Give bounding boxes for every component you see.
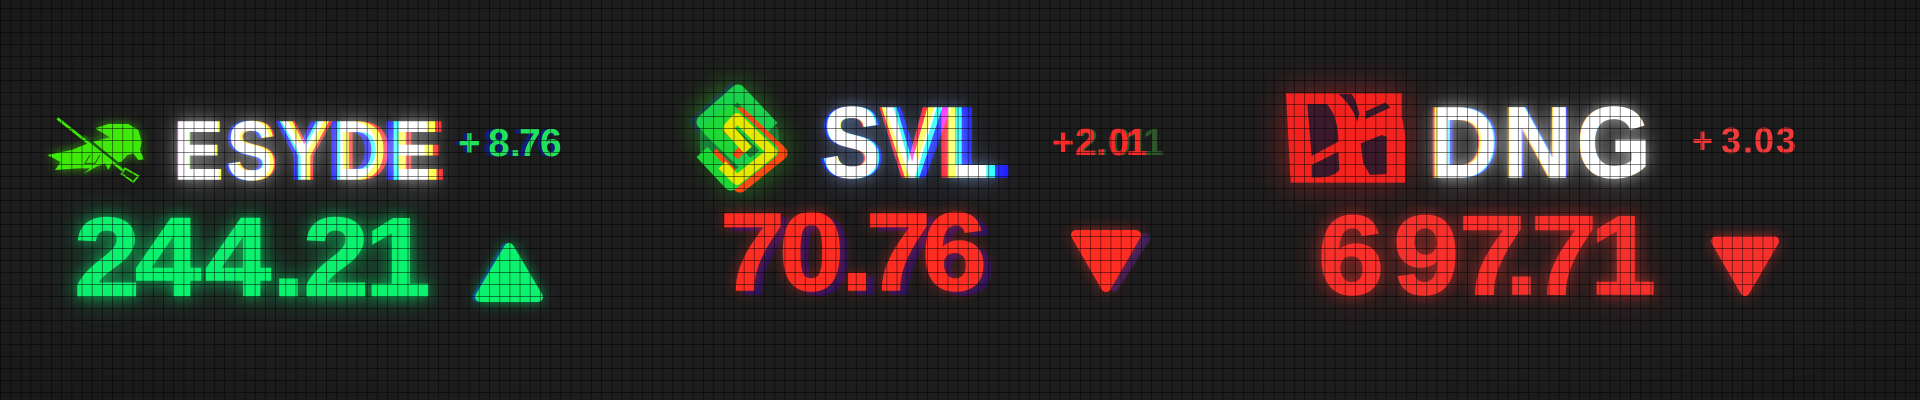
arrow: down triangle (1076, 235, 1146, 287)
ticker name: DNG: DNG (1430, 87, 1655, 199)
icon: red DG monogram logo (1286, 93, 1406, 183)
panel: DNG ticker (1286, 86, 1796, 318)
change value: +8.76: +8.76 (458, 122, 562, 165)
price: 697.71: 697.71 (1318, 194, 1656, 318)
ticker name: SVL: SVL (822, 87, 999, 199)
price: 70.76: 70.76 (720, 191, 987, 314)
panel: ESYDE ticker (47, 104, 562, 320)
ticker name: DNG: DNG (1427, 86, 1656, 198)
ticker name: ESYDE: ESYDE (174, 104, 445, 197)
ticker name: ESYDE: ESYDE (174, 104, 445, 197)
change value: +2.01: 2.011 (1077, 122, 1164, 164)
icon: green bird with rifle logo (47, 118, 144, 182)
price: 244.21: 244.21 (74, 196, 431, 320)
panel: SVL ticker (689, 81, 1164, 318)
price: 70.76: 70.76 (720, 191, 987, 314)
price: 697.71: 697.71 (1318, 194, 1656, 318)
ticker name: DNG: DNG (1429, 86, 1656, 198)
ticker name: SVL: SVL (822, 87, 999, 199)
arrow: down triangle (1716, 241, 1774, 291)
change value: +2.01: +2.01 (1052, 122, 1147, 164)
change value: +8.76: +8.76 (454, 122, 558, 165)
arrow: up triangle (477, 248, 538, 297)
ticker name: SVL: SVL (822, 88, 997, 199)
change value: +3.03: +3.03 (1692, 120, 1796, 161)
icon: green and yellow diamond S logo (689, 81, 785, 193)
ticker name: ESYDE: ESYDE (174, 104, 442, 197)
price: 244.21: 244.21 (74, 196, 431, 320)
ticker name: ESYDE: ESYDE (173, 105, 434, 197)
ticker name: SVL: SVL (823, 86, 988, 199)
price: 244.21: 244.21 (74, 196, 431, 320)
ticker name: ESYDE: ESYDE (173, 104, 449, 197)
ticker name: SVL: SVL (819, 87, 1011, 199)
ticker name: DNG: DNG (1432, 86, 1655, 199)
price: 70.76: 70.76 (728, 195, 995, 318)
ticker name: DNG: DNG (1430, 87, 1655, 199)
price: 697.71: 697.71 (1318, 194, 1656, 318)
